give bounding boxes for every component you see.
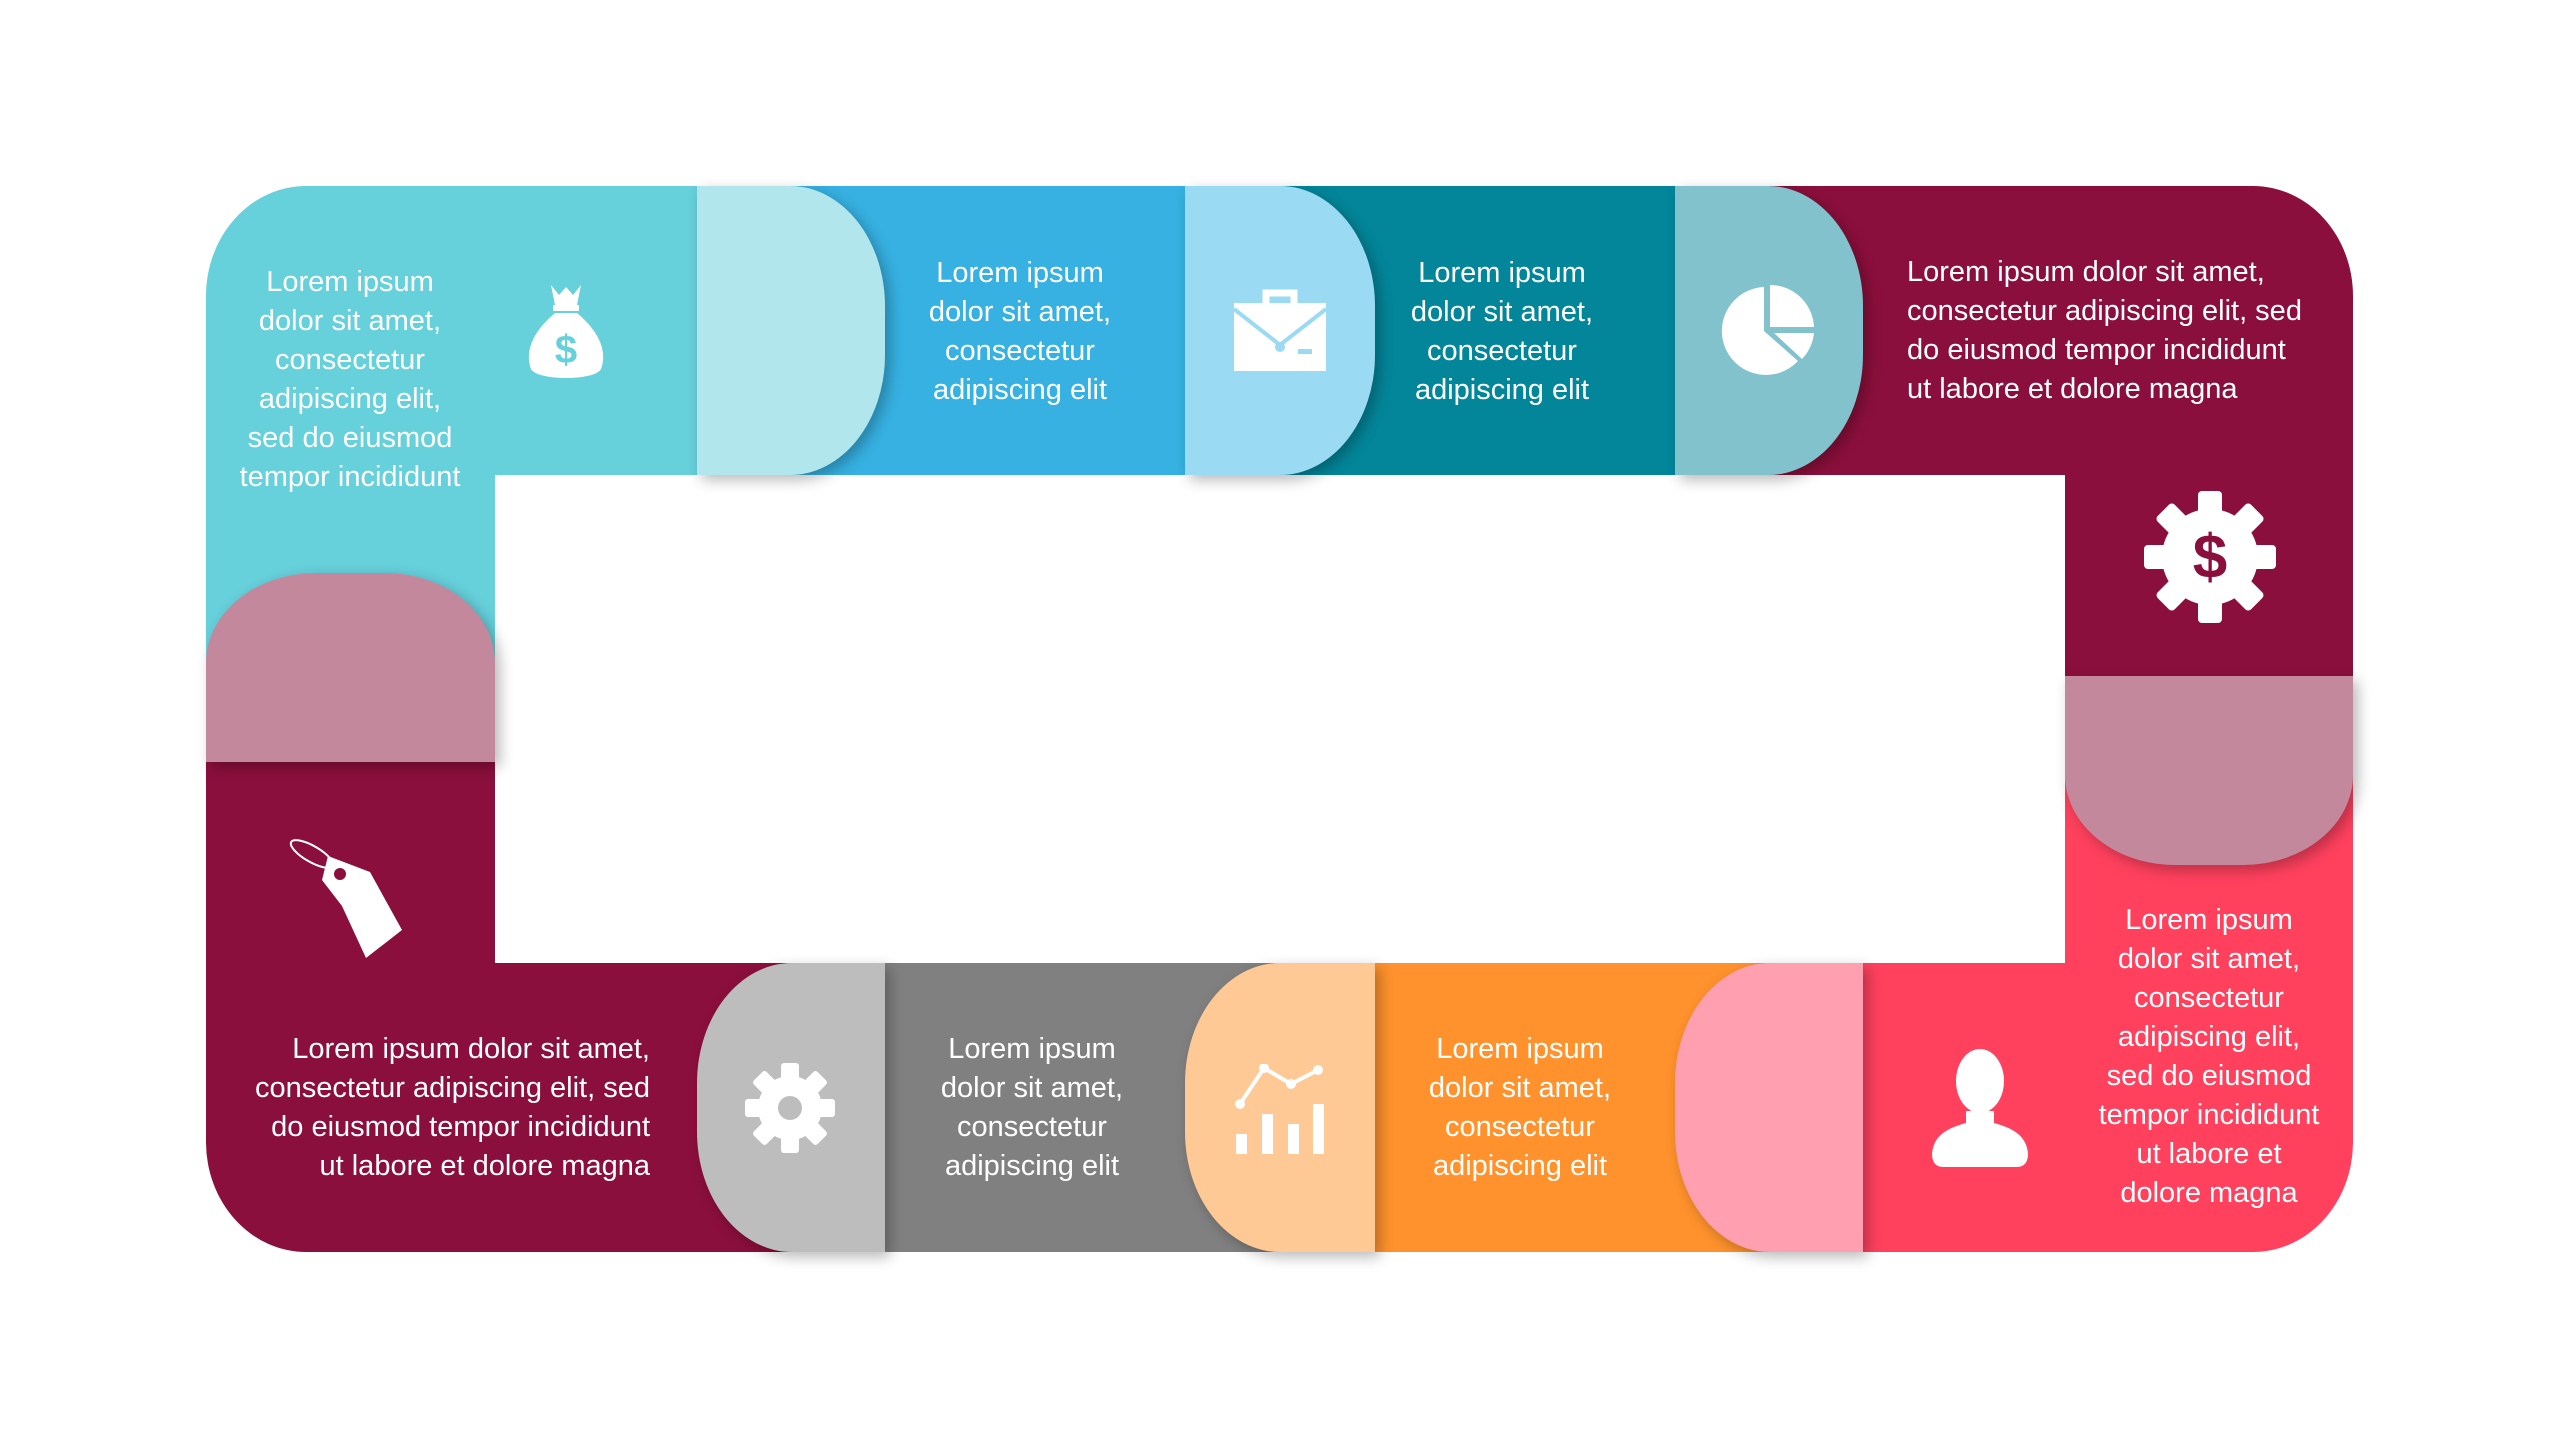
text: step 5: Lorem ipsum dolor sit amet, consectetur adipiscing elit, sed do eiusmod tempor incididunt ut labore et dolore magna [2099, 904, 2319, 1209]
tab: light gray [697, 963, 885, 1252]
panel: maroon top-right segment [1700, 186, 2353, 475]
panel: maroon bottom-left segment [206, 963, 826, 1252]
icon: pie chart [1722, 285, 1814, 375]
text: step 2: Lorem ipsum dolor sit amet, consectetur adipiscing elit [929, 257, 1111, 406]
tab: mauve left [206, 573, 495, 762]
text: step 3: Lorem ipsum dolor sit amet, consectetur adipiscing elit [1411, 257, 1593, 406]
icon: gear [745, 1063, 835, 1153]
tab: peach [1185, 963, 1375, 1252]
icon: money bag [528, 285, 604, 378]
tab: mauve right [2065, 676, 2353, 865]
text: step 6: Lorem ipsum dolor sit amet, consectetur adipiscing elit [1429, 1033, 1611, 1182]
icon: briefcase [1234, 290, 1326, 371]
text: step 4: Lorem ipsum dolor sit amet, consectetur adipiscing elit, sed do eiusmod tempor incididunt ut labore et dolore magna [1907, 256, 2302, 405]
tab: pink [1675, 963, 1863, 1252]
tab: light teal [697, 186, 885, 475]
tab: light blue [1185, 186, 1375, 475]
panel: red bottom-right segment [2065, 760, 2353, 1060]
icon: price tag [290, 839, 402, 958]
icon: gear with dollar [2144, 491, 2276, 623]
tab: grayish teal [1675, 186, 1863, 475]
panel: orange segment [1300, 963, 1800, 1252]
panel: left teal and column segments [206, 186, 706, 475]
panel: blue segment [720, 186, 1210, 475]
icon: money bag: $ [555, 328, 577, 372]
text: step 1: Lorem ipsum dolor sit amet, consectetur adipiscing elit, sed do eiusmod tempor incididunt [240, 266, 460, 493]
panel: dark teal segment [1210, 186, 1710, 475]
icon: user [1932, 1049, 2028, 1167]
icon: chart [1235, 1064, 1324, 1154]
icon: gear with dollar: $ [2193, 523, 2227, 592]
text: step 8: Lorem ipsum dolor sit amet, consectetur adipiscing elit, sed do eiusmod tempor incididunt ut labore et dolore magna [255, 1033, 650, 1182]
panel: gray segment [800, 963, 1320, 1252]
text: step 7: Lorem ipsum dolor sit amet, consectetur adipiscing elit [941, 1033, 1123, 1182]
